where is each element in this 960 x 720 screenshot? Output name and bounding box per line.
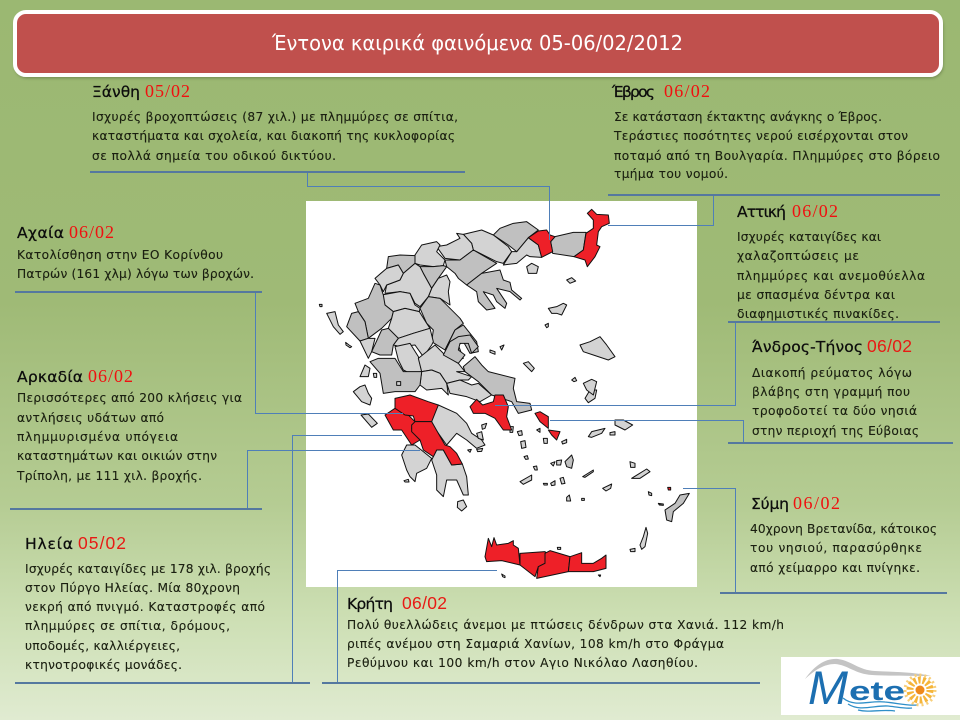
panel: Achaia: Πατρών (161 χλμ) λόγω των βροχών. bbox=[17, 267, 254, 281]
panel: Kriti: 06/02 bbox=[402, 593, 447, 613]
panel: Attiki: με σπασμένα δέντρα και bbox=[737, 288, 895, 302]
panel: Evros: Έβρος bbox=[611, 83, 655, 101]
panel: Arkadia: Τρίπολη, με 111 χιλ. βροχής. bbox=[16, 469, 202, 483]
panel: Ileia: Ισχυρές καταιγίδες με 178 χιλ. βροχής bbox=[25, 562, 271, 576]
panel: Achaia: Αχαία bbox=[17, 224, 64, 242]
panel: Arkadia: πλημμυρισμένα υπόγεια bbox=[17, 430, 178, 444]
panel: Evros: τμήμα του νομού. bbox=[614, 167, 728, 181]
panel: Arkadia: αντλήσεις υδάτων από bbox=[17, 411, 164, 425]
panel: Arkadia: καταστημάτων και οικιών στην bbox=[17, 449, 217, 463]
panel: Kriti: Ρεθύμνου και 100 km/h στον Αγιο Νικόλαο Λασηθίου. bbox=[347, 656, 698, 670]
title banner bbox=[15, 12, 943, 78]
panel: Andros-Tinos: 06/02 bbox=[867, 336, 912, 356]
panel: Attiki: χαλαζοπτώσεις με bbox=[737, 249, 859, 263]
map panel bbox=[306, 201, 697, 587]
panel: Xanthi: καταστήματα και σχολεία, και διακοπή της κυκλοφορίας bbox=[92, 129, 455, 143]
panel: Attiki: διαφημιστικές πινακίδες. bbox=[737, 307, 899, 321]
map: central Greece bbox=[353, 335, 532, 413]
panel: Evros bbox=[608, 81, 940, 195]
panel: Achaia: Κατολίσθηση στην ΕΟ Κορίνθου bbox=[17, 248, 223, 262]
panel: Evros: ποταμό από τη Βουλγαρία. Πλημμύρες στο βόρειο bbox=[614, 149, 940, 163]
panel: Ileia: κτηνοτροφικές μονάδες. bbox=[25, 658, 182, 672]
panel: Andros-Tinos bbox=[728, 336, 953, 443]
panel: Kriti: ριπές ανέμου στη Σαμαριά Χανίων, 108 km/h στο Φράγμα bbox=[347, 637, 724, 651]
map: southern Greece and islands bbox=[361, 379, 689, 578]
panel: Kriti bbox=[322, 593, 784, 683]
panel: Andros-Tinos: Άνδρος-Τήνος bbox=[752, 338, 863, 356]
panel: Symi: Σύμη bbox=[751, 495, 789, 513]
panel: Attiki bbox=[728, 201, 940, 322]
panel: Xanthi bbox=[90, 81, 465, 172]
panel: Kriti: Κρήτη bbox=[347, 595, 393, 613]
panel: Symi: 06/02 bbox=[793, 493, 840, 513]
panel: Symi: του νησιού, παρασύρθηκε bbox=[750, 541, 922, 555]
panel: Ileia: πλημμύρες σε σπίτια, δρόμους, bbox=[25, 619, 230, 633]
panel: Ileia: Ηλεία bbox=[25, 535, 73, 553]
panel: Evros: Τεράστιες ποσότητες νερού εισέρχονται στον bbox=[613, 129, 908, 143]
panel: Arkadia: Περισσότερες από 200 κλήσεις για bbox=[17, 391, 242, 405]
panel: Attiki: Ισχυρές καταιγίδες και bbox=[737, 230, 881, 244]
panel: Evros: 06/02 bbox=[664, 81, 710, 101]
panel: Symi: από χείμαρρο και πνίγηκε. bbox=[750, 561, 920, 575]
panel: Arkadia: Αρκαδία bbox=[17, 368, 83, 386]
panel: Andros-Tinos: Διακοπή ρεύματος λόγω bbox=[752, 366, 912, 380]
logo: Meteo: M bbox=[808, 661, 849, 714]
connector lines bbox=[248, 172, 744, 683]
panel: Symi: 40χρονη Βρετανίδα, κάτοικος bbox=[750, 522, 937, 536]
panel: Attiki: 06/02 bbox=[792, 201, 838, 221]
panel: Ileia: υποδομές, καλλιέργειες, bbox=[25, 639, 180, 653]
panel: Attiki: πλημμύρες και ανεμοθύελλα bbox=[737, 269, 925, 283]
panel: Kriti: Πολύ θυελλώδεις άνεμοι με πτώσεις δένδρων στα Χανιά. 112 km/h bbox=[347, 618, 784, 632]
panel: Symi bbox=[720, 493, 947, 593]
panel: Ileia: 05/02 bbox=[78, 533, 126, 553]
map: northern Greece bbox=[319, 209, 615, 382]
logo: Meteo: ete bbox=[849, 676, 905, 706]
panel: Ileia bbox=[15, 533, 310, 683]
panel: Andros-Tinos: βλάβης στη γραμμή που bbox=[752, 385, 910, 399]
panel: Attiki: Αττική bbox=[737, 203, 786, 221]
panel: Xanthi: Ξάνθη bbox=[92, 83, 140, 101]
panel: Xanthi: 05/02 bbox=[145, 81, 190, 101]
panel: Andros-Tinos: στην περιοχή της Εύβοιας bbox=[752, 424, 919, 438]
panel: Achaia: 06/02 bbox=[69, 222, 114, 242]
logo: Meteo bbox=[781, 657, 960, 715]
panel: Xanthi: σε πολλά σημεία του οδικού δικτύου. bbox=[92, 149, 336, 163]
panel: Arkadia: 06/02 bbox=[88, 366, 133, 386]
panel: Arkadia bbox=[10, 366, 262, 509]
panel: Andros-Tinos: τροφοδοτεί τα δύο νησιά bbox=[752, 404, 917, 418]
panel: Ileia: νεκρή από πνιγμό. Καταστροφές από bbox=[25, 600, 265, 614]
panel: Evros: Σε κατάσταση έκτακτης ανάγκης ο Έβρος. bbox=[614, 110, 882, 124]
panel: Achaia bbox=[15, 222, 262, 292]
title banner: Έντονα καιρικά φαινόμενα 05-06/02/2012 bbox=[271, 31, 683, 55]
icon: sun bbox=[905, 675, 935, 705]
panel: Ileia: στον Πύργο Ηλείας. Μία 80χρονη bbox=[25, 581, 240, 595]
panel: Xanthi: Ισχυρές βροχοπτώσεις (87 χιλ.) με πλημμύρες σε σπίτια, bbox=[92, 110, 458, 124]
